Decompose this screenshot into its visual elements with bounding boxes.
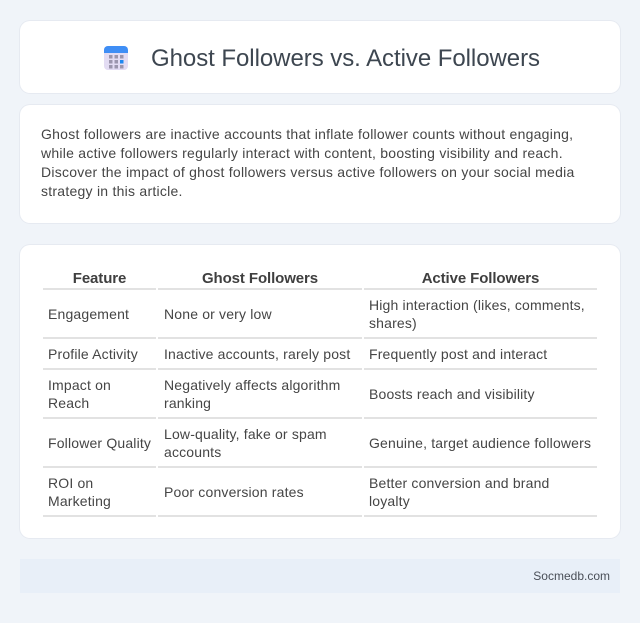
cell: shares) bbox=[369, 315, 417, 331]
header: Active Followers: Active Followers bbox=[422, 270, 539, 287]
cell: loyalty bbox=[369, 493, 410, 509]
cell bbox=[164, 426, 327, 460]
title: Ghost Followers vs. Active Followers bbox=[151, 45, 540, 72]
intro panel bbox=[20, 105, 620, 223]
footer bar bbox=[20, 559, 620, 593]
footer text: Socmedb.com bbox=[533, 569, 610, 583]
intro text: Ghost followers are inactive accounts that inflate follower counts without engaging, bbox=[41, 126, 573, 142]
cell: accounts bbox=[164, 444, 221, 460]
cell: Boosts reach and visibility bbox=[369, 386, 535, 402]
intro text: Discover the impact of ghost followers versus active followers on your social media bbox=[41, 164, 575, 180]
row: ROI on Marketing bbox=[48, 475, 111, 509]
header: Feature: Feature bbox=[73, 270, 126, 287]
cell: Low-quality, fake or spam bbox=[164, 426, 327, 442]
intro text: strategy in this article. bbox=[41, 183, 183, 199]
row: Impact on Reach bbox=[48, 377, 111, 411]
cell: Poor conversion rates bbox=[164, 484, 304, 500]
cell: High interaction (likes, comments, bbox=[369, 297, 585, 313]
row: Engagement: Engagement bbox=[48, 306, 129, 322]
row: ROI on Marketing: Marketing bbox=[48, 493, 111, 509]
header: Ghost Followers: Ghost Followers bbox=[202, 270, 318, 287]
table panel bbox=[20, 245, 620, 538]
cell: Better conversion and brand bbox=[369, 475, 549, 491]
cell bbox=[369, 475, 549, 509]
cell: Negatively affects algorithm bbox=[164, 377, 340, 393]
cell bbox=[164, 377, 340, 411]
intro text bbox=[41, 126, 575, 199]
cell: Inactive accounts, rarely post bbox=[164, 346, 350, 362]
row: Follower Quality: Follower Quality bbox=[48, 435, 151, 451]
row: Profile Activity: Profile Activity bbox=[48, 346, 138, 362]
cell: ranking bbox=[164, 395, 211, 411]
cell: Frequently post and interact bbox=[369, 346, 547, 362]
row: Impact on Reach: Impact on bbox=[48, 377, 111, 393]
row: ROI on Marketing: ROI on bbox=[48, 475, 93, 491]
row: Impact on Reach: Reach bbox=[48, 395, 89, 411]
cell bbox=[369, 297, 585, 331]
title panel bbox=[20, 21, 620, 93]
cell: None or very low bbox=[164, 306, 272, 322]
cell: Genuine, target audience followers bbox=[369, 435, 591, 451]
icon: calendar bbox=[104, 46, 128, 70]
intro text: while active followers regularly interact with content, boosting visibility and reach. bbox=[41, 145, 563, 161]
